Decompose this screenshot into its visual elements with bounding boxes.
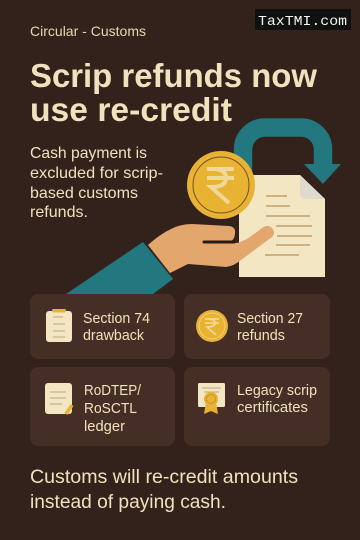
intro text: refunds.: [30, 204, 88, 221]
label: [84, 383, 142, 435]
title: [30, 57, 317, 128]
panel: RoDTEP/RoSCTL ledger: [30, 367, 175, 446]
label: RoDTEP/: [84, 383, 142, 399]
label: drawback: [83, 328, 145, 344]
hero illustration: [66, 128, 341, 294]
icon: certificate with seal: [198, 383, 225, 414]
label: RoSCTL: [84, 401, 137, 417]
intro text: excluded for scrip-: [30, 165, 163, 182]
label: Section 27: [237, 311, 303, 327]
document: [239, 175, 325, 277]
closing statement: [30, 466, 298, 513]
label: certificates: [237, 400, 308, 416]
closing statement: Customs will re-credit amounts: [30, 466, 298, 488]
hand: [148, 224, 274, 273]
intro text: based customs: [30, 185, 138, 202]
title: Scrip refunds now: [30, 57, 317, 94]
panel: section 27 refunds: [184, 294, 330, 359]
icon: coin: [196, 310, 228, 342]
sleeve: [66, 242, 173, 294]
panel: section 74 drawback: [30, 294, 175, 359]
arrow: re-credit loop: [243, 128, 341, 184]
label: [237, 311, 303, 344]
icon: clipboard: [46, 309, 72, 342]
label: ledger: [84, 419, 125, 435]
label: Legacy scrip: [237, 383, 317, 399]
watermark badge: TaxTMI.com: [258, 14, 347, 30]
eyebrow: circular category: Circular - Customs: [30, 23, 146, 39]
label: refunds: [237, 328, 285, 344]
intro text: Cash payment is: [30, 145, 147, 162]
title: use re-credit: [30, 91, 232, 128]
label: Section 74: [83, 311, 150, 327]
panel: legacy scrip certificates: [184, 367, 330, 446]
label: [83, 311, 150, 344]
icon: ledger with pencil: [45, 383, 72, 414]
intro text: [30, 145, 163, 221]
label: [237, 383, 317, 416]
closing statement: instead of paying cash.: [30, 491, 226, 513]
watermark badge: [255, 9, 351, 30]
icon: rupee coin: [187, 151, 255, 219]
